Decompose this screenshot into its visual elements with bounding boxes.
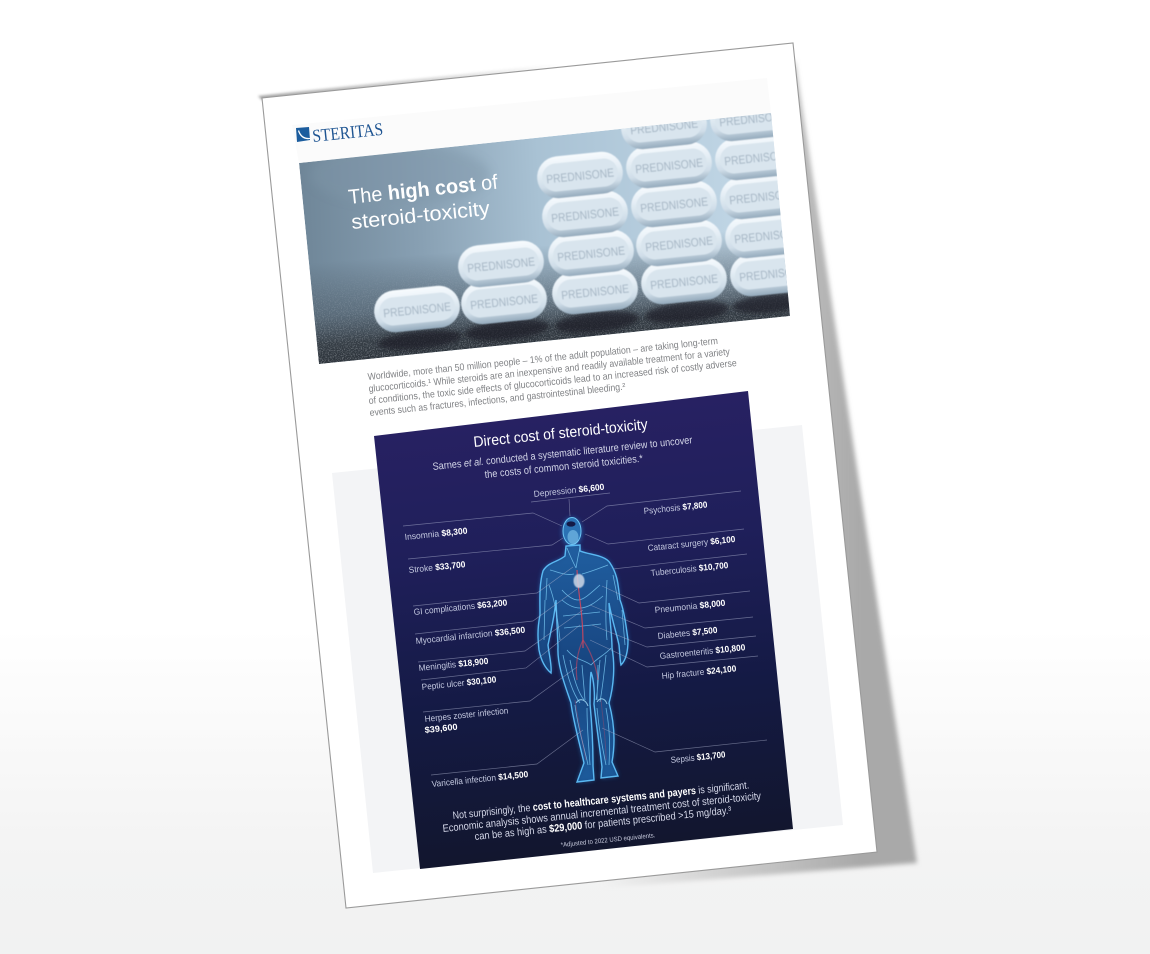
label: gastroenteritis: Gastroenteritis $10,800: [659, 642, 746, 661]
pill: PREDNISONE: [561, 282, 630, 302]
intro paragraph: [367, 336, 738, 419]
pill: PREDNISONE: [729, 187, 798, 207]
pill: [636, 220, 722, 267]
label: herpes zoster infection: $39,600: [424, 722, 458, 735]
pill: PREDNISONE: [557, 244, 626, 264]
panel heading: Direct cost of steroid-toxicity: [473, 416, 649, 451]
panel subheading: the costs of common steroid toxicities.*: [484, 454, 643, 481]
label: insomnia: Insomnia $8,300: [404, 526, 468, 542]
label: diabetes: Diabetes $7,500: [657, 625, 718, 641]
label: myocardial infarction: Myocardial infarction $36,500: [415, 625, 526, 646]
pill: PREDNISONE: [645, 234, 714, 254]
pill: PREDNISONE: [635, 156, 704, 176]
hero title: steroid-toxicity: [350, 197, 492, 234]
intro paragraph: of conditions, the toxic side effects of glucocorticoids lead to an increased risk of costly adverse: [368, 358, 738, 407]
faint header panel: [292, 78, 771, 163]
label: depression: Depression $6,600: [533, 482, 605, 499]
label: pneumonia: Pneumonia $8,000: [654, 598, 726, 615]
pill: [535, 150, 625, 200]
hero image: stacked prednisone pills: [299, 113, 790, 364]
pill: PREDNISONE: [630, 117, 699, 137]
pill: [460, 279, 548, 325]
dark panel background: [374, 391, 793, 869]
pill: [620, 120, 707, 150]
pill: PREDNISONE: [640, 195, 709, 215]
face: [568, 530, 578, 544]
panel conclusion text: Not surprisingly, the cost to healthcare systems and payers is significant.: [452, 779, 750, 822]
pill: [720, 176, 780, 220]
hero title: The high cost of: [347, 171, 499, 209]
label: psychosis: Psychosis $7,800: [643, 499, 708, 516]
pill: PREDNISONE: [551, 205, 620, 225]
pill: PREDNISONE: [734, 226, 803, 246]
pill: [714, 136, 777, 181]
icon: logo square: [296, 127, 310, 142]
pill: PREDNISONE: [739, 264, 808, 284]
pill: [630, 181, 717, 228]
label: varicella infection: Varicella infection $14,500: [431, 769, 529, 789]
logo wordmark: STERITAS: [311, 119, 384, 146]
cost labels: [404, 482, 746, 789]
panel: direct cost of steroid-toxicity: [374, 391, 793, 869]
brain: [566, 521, 576, 527]
label: herpes zoster infection: [424, 705, 509, 735]
label: cataract surgery: Cataract surgery $6,100: [647, 534, 736, 553]
logo: Steritas: [296, 119, 384, 146]
illustration: human body: [538, 518, 628, 782]
pill: PREDNISONE: [650, 272, 719, 292]
label: stroke: Stroke $33,700: [408, 559, 466, 575]
label: sepsis: Sepsis $13,700: [670, 749, 726, 765]
label: peptic ulcer: Peptic ulcer $30,100: [421, 674, 497, 692]
label: GI complications: GI complications $63,200: [413, 597, 508, 617]
document page: [262, 43, 877, 908]
pill: PREDNISONE: [467, 255, 536, 275]
label: meningitis: Meningitis $18,900: [418, 656, 489, 673]
pill: [372, 284, 462, 334]
intro paragraph: Worldwide, more than 50 million people – 1% of the adult population – are taking long-term: [367, 336, 718, 383]
hero title: [347, 171, 499, 234]
label: hip fracture: Hip fracture $24,100: [661, 663, 737, 681]
label: tuberculosis: Tuberculosis $10,700: [650, 560, 729, 578]
pill: PREDNISONE: [546, 166, 615, 186]
pill: [640, 258, 728, 305]
panel subheading: Sarnes et al. conducted a systematic literature review to uncover: [432, 435, 693, 473]
pill: PREDNISONE: [470, 292, 539, 312]
pill: PREDNISONE: [724, 148, 793, 168]
pill: [710, 113, 774, 142]
intro paragraph: glucocorticoids.¹ While steroids are an inexpensive and readily available treatment for a variety: [368, 347, 730, 395]
pill: PREDNISONE: [383, 300, 452, 320]
pill: [724, 214, 784, 259]
pill reflections: [377, 290, 813, 353]
panel conclusion text: Economic analysis shows annual incremental treatment cost of steroid-toxicity: [442, 790, 762, 835]
pill: [546, 228, 636, 278]
leader lines: [403, 491, 767, 775]
heart: [574, 574, 584, 588]
intro paragraph: events such as fractures, infections, and gastrointestinal bleeding.²: [369, 382, 627, 419]
pill: [552, 268, 638, 315]
light grey backing panel: [332, 425, 843, 873]
pill: PREDNISONE: [719, 109, 788, 129]
panel conclusion text: can be as high as $29,000 for patients prescribed >15 mg/day.³: [474, 804, 732, 843]
footnote: *Adjusted to 2022 USD equivalents.: [560, 832, 656, 849]
page shadow: [258, 60, 917, 888]
pill: [542, 191, 628, 238]
pill: [456, 239, 546, 289]
label: herpes zoster infection: Herpes zoster infection: [424, 705, 509, 724]
muscle lines: [544, 548, 625, 765]
pill: [626, 142, 712, 189]
pill: [730, 254, 788, 297]
arteries: [575, 570, 606, 760]
